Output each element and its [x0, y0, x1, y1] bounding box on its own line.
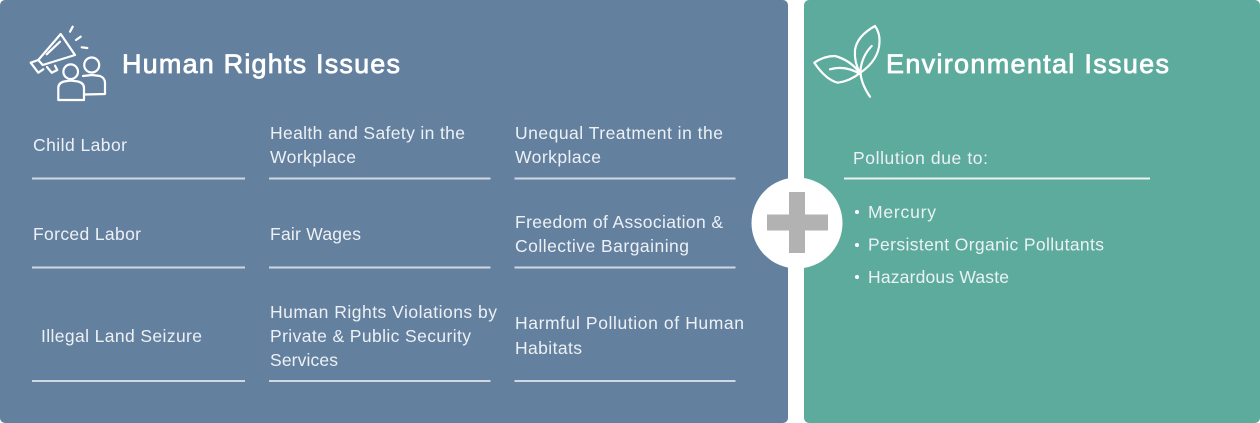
- item: human rights violations: Services: [270, 350, 338, 370]
- item: harmful pollution: Habitats: [515, 338, 582, 358]
- list: pollutants: Persistent Organic Pollutants: [868, 234, 1104, 254]
- heading: human rights issues: Human Rights Issues: [122, 49, 400, 79]
- item: health and safety: Health and Safety in the: [270, 123, 465, 143]
- item: harmful pollution: Harmful Pollution of Human: [515, 313, 744, 333]
- item: health and safety: Workplace: [270, 147, 356, 167]
- item: harmful pollution: [514, 313, 744, 382]
- item: freedom of association: Freedom of Association &: [515, 212, 723, 232]
- item: freedom of association: [514, 212, 736, 268]
- icon: plus in white circle: [752, 178, 842, 268]
- item: unequal treatment: Unequal Treatment in the: [515, 123, 723, 143]
- item: human rights violations: [269, 302, 497, 382]
- item: unequal treatment: [514, 123, 736, 180]
- item: health and safety: [269, 123, 490, 180]
- icon: leaves: [814, 26, 880, 97]
- list: pollutants: Hazardous Waste: [868, 267, 1009, 287]
- list: pollutants: [855, 202, 1104, 287]
- item: illegal land seizure: Illegal Land Seizure: [41, 326, 202, 346]
- icon: megaphone and people: [31, 27, 105, 100]
- panel: human rights issues: [0, 0, 788, 423]
- heading: environmental issues: Environmental Issues: [886, 49, 1169, 79]
- item: child labor: Child Labor: [33, 135, 127, 155]
- item: fair wages: Fair Wages: [270, 224, 361, 244]
- item: freedom of association: Collective Bargaining: [515, 236, 689, 256]
- item: human rights violations: Human Rights Violations by: [270, 302, 497, 322]
- text: pollution due to: Pollution due to:: [853, 148, 988, 168]
- item: forced labor: Forced Labor: [33, 224, 141, 244]
- item: unequal treatment: Workplace: [515, 147, 601, 167]
- item: human rights violations: Private & Public Security: [270, 326, 471, 346]
- panel: environmental issues: [804, 0, 1260, 423]
- list: pollutants: Mercury: [868, 202, 936, 222]
